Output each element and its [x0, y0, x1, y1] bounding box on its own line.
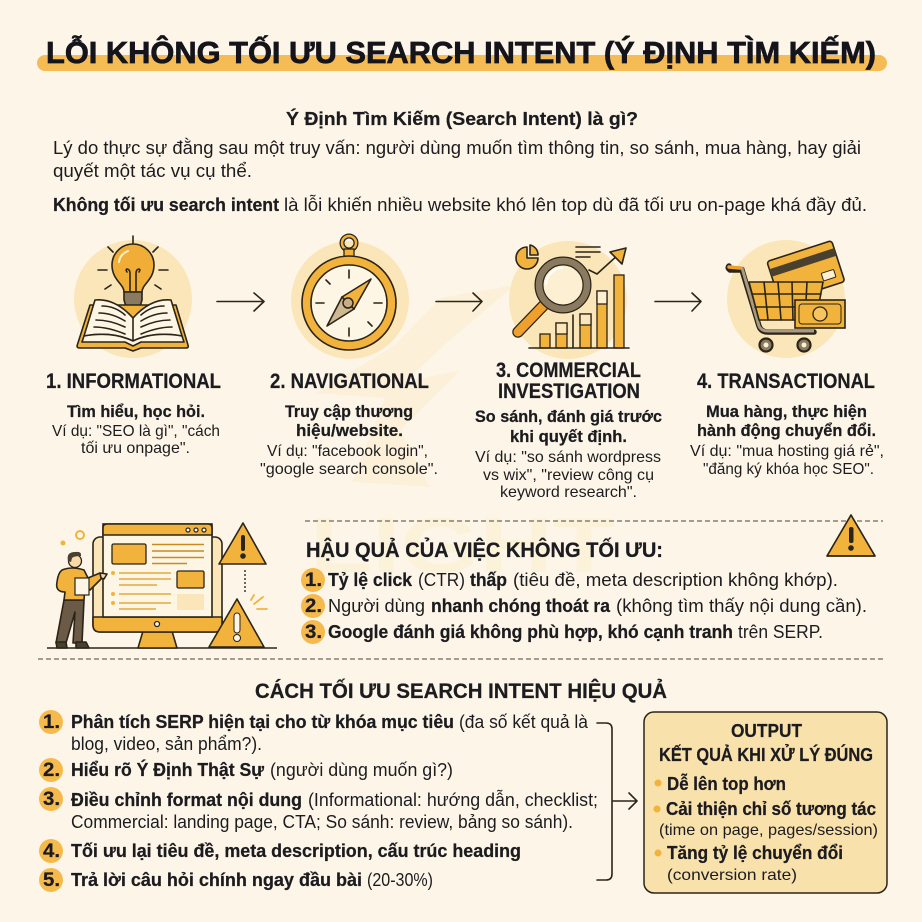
- bracket and arrow to output: [597, 723, 637, 880]
- panel: output: [644, 712, 887, 893]
- intro text block: [53, 108, 867, 215]
- type 3: commercial investigation: khi quyết định.: [510, 427, 627, 446]
- type 2: navigational: Truy cập thương: [285, 402, 413, 421]
- optimization steps: Phân tích SERP hiện tại cho từ khóa mục tiêu: [71, 712, 454, 732]
- type 2: navigational: "google search console".: [260, 461, 438, 478]
- panel: output: OUTPUT: [731, 721, 802, 741]
- consequences list: trên SERP.: [738, 622, 823, 642]
- type 4: transactional: Ví dụ: "mua hosting giá rẻ",: [690, 443, 884, 460]
- optimization steps: (người dùng muốn gì?): [270, 760, 453, 780]
- consequences list: (CTR): [418, 570, 465, 590]
- optimization steps: 5.: [43, 870, 60, 891]
- icon: magnifier and bar chart: [509, 241, 629, 359]
- title: LỖI KHÔNG TỐI ƯU SEARCH INTENT (Ý ĐỊNH TÌM KIẾM): [46, 34, 876, 70]
- optimization steps: Trả lời câu hỏi chính ngay đầu bài: [71, 870, 362, 890]
- type 3: commercial investigation: [475, 359, 662, 501]
- intro text block: quyết một tác vụ cụ thể.: [53, 160, 252, 181]
- watermark: lightning and brand: LIGHT: [310, 501, 615, 589]
- consequences list: [301, 568, 867, 644]
- panel: output: Dễ lên top hơn: [667, 773, 786, 794]
- optimization steps: blog, video, sản phẩm?).: [71, 734, 262, 754]
- optimization steps: 3.: [43, 789, 60, 810]
- consequences list: 1.: [305, 570, 322, 591]
- consequences list: (không tìm thấy nội dung cần).: [616, 596, 867, 616]
- optimization steps: Commercial: landing page, CTA; So sánh: review, bảng so sánh).: [71, 812, 573, 832]
- consequences list: Google đánh giá không phù hợp, khó cạnh tranh: [328, 622, 733, 642]
- arrow 1: [217, 293, 264, 311]
- type 1: informational: Ví dụ: "SEO là gì", "cách: [52, 423, 220, 440]
- arrow 3: [655, 293, 701, 311]
- icon: shopping cart with card and cash: [727, 240, 845, 358]
- intro text block: Không tối ưu search intent: [53, 194, 279, 215]
- arrow 2: [436, 293, 482, 311]
- type 3: commercial investigation: Ví dụ: "so sánh wordpress: [475, 449, 661, 466]
- panel: output: (conversion rate): [667, 867, 797, 884]
- optimization steps: 4.: [43, 841, 60, 862]
- illustration: person presenting a monitor with warnings: [47, 523, 277, 648]
- optimization steps: (đa số kết quả là: [459, 712, 589, 732]
- optimization heading: CÁCH TỐI ƯU SEARCH INTENT HIỆU QUẢ: [255, 679, 667, 703]
- type 3: commercial investigation: So sánh, đánh giá trước: [475, 407, 662, 426]
- consequences list: Người dùng: [328, 596, 425, 616]
- consequences heading: HẬU QUẢ CỦA VIỆC KHÔNG TỐI ƯU:: [306, 538, 663, 562]
- optimization steps: Hiểu rõ Ý Định Thật Sự: [71, 759, 265, 780]
- intro text block: Lý do thực sự đằng sau một truy vấn: người dùng muốn tìm thông tin, so sánh, mua hàng, hay giải: [53, 137, 861, 158]
- panel: output: Cải thiện chỉ số tương tác: [666, 799, 876, 819]
- optimization steps: (20-30%): [367, 870, 433, 890]
- icon: warning triangle: [827, 515, 875, 556]
- type 3: commercial investigation: 3. COMMERCIAL: [496, 359, 641, 382]
- type 4: transactional: hành động chuyển đổi.: [697, 421, 876, 440]
- type 1: informational: tối ưu onpage".: [81, 440, 190, 457]
- panel: output: (time on page, pages/session): [659, 822, 878, 839]
- panel: output: KẾT QUẢ KHI XỬ LÝ ĐÚNG: [659, 744, 873, 765]
- consequences list: 2.: [305, 596, 322, 617]
- type 4: transactional: Mua hàng, thực hiện: [706, 402, 867, 421]
- type 1: informational: 1. INFORMATIONAL: [46, 370, 221, 393]
- optimization steps: Tối ưu lại tiêu đề, meta description, cấu trúc heading: [71, 841, 521, 861]
- consequences list: Tỷ lệ click: [328, 570, 413, 590]
- consequences list: nhanh chóng thoát ra: [431, 596, 611, 616]
- type 2: navigational: [260, 370, 438, 478]
- consequences list: 3.: [305, 622, 322, 643]
- intro text block: Ý Định Tìm Kiếm (Search Intent) là gì?: [286, 108, 638, 129]
- type 4: transactional: [690, 370, 884, 478]
- consequences list: thấp: [470, 570, 507, 590]
- type 4: transactional: "đăng ký khóa học SEO".: [703, 461, 874, 478]
- consequences list: (tiêu đề, meta description không khớp).: [513, 570, 838, 590]
- icon: compass: [291, 236, 409, 359]
- type 1: informational: [46, 370, 221, 457]
- optimization steps: 1.: [43, 712, 60, 733]
- optimization steps: [39, 710, 598, 892]
- type 3: commercial investigation: vs wix", "review công cụ: [483, 467, 654, 484]
- optimization steps: Điều chỉnh format nội dung: [71, 790, 302, 810]
- optimization steps: (Informational: hướng dẫn, checklist;: [308, 789, 598, 810]
- type 3: commercial investigation: keyword research".: [500, 484, 637, 501]
- type 3: commercial investigation: INVESTIGATION: [498, 380, 640, 403]
- icon: light bulb over open book: [74, 236, 192, 358]
- type 4: transactional: 4. TRANSACTIONAL: [697, 370, 875, 393]
- type 2: navigational: 2. NAVIGATIONAL: [270, 370, 429, 393]
- watermark: lightning and brand: [310, 285, 615, 589]
- optimization steps: 2.: [43, 760, 60, 781]
- type 2: navigational: hiệu/website.: [296, 421, 403, 440]
- type 1: informational: Tìm hiểu, học hỏi.: [67, 402, 205, 421]
- panel: output: Tăng tỷ lệ chuyển đổi: [667, 843, 843, 863]
- type 2: navigational: Ví dụ: "facebook login",: [267, 443, 428, 460]
- intro text block: là lỗi khiến nhiều website khó lên top dù đã tối ưu on-page khá đầy đủ.: [284, 194, 867, 215]
